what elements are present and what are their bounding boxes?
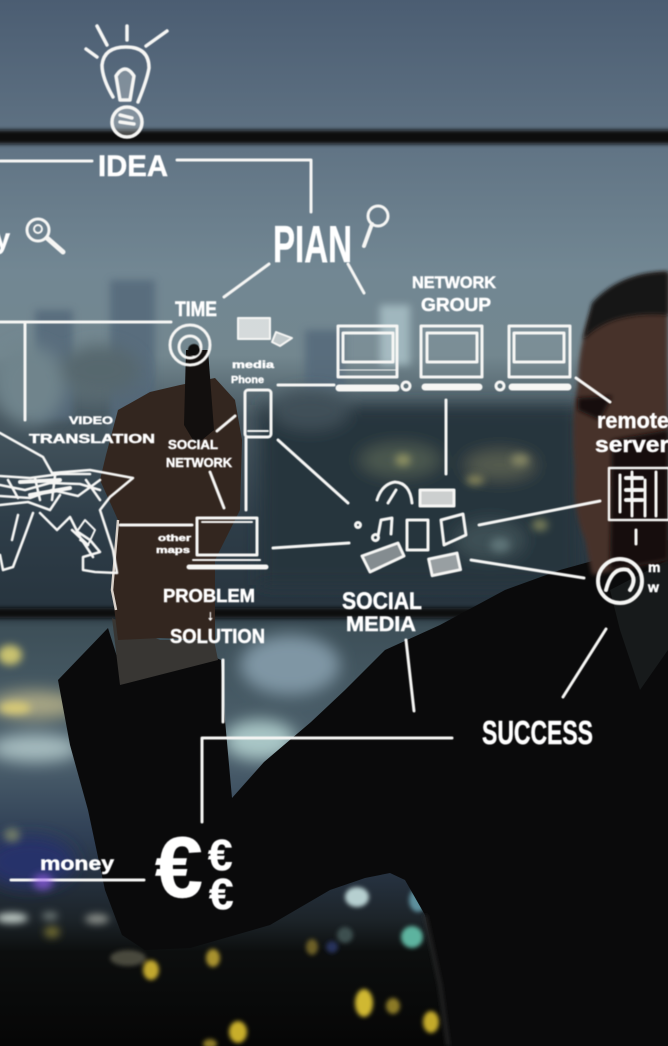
connector lines: network [278,378,610,474]
label: phone: Phone [231,375,264,386]
man: cuff [112,618,218,685]
label: network group: NETWORK [412,273,497,292]
man: suit body and sleeve [58,540,668,1046]
connector: time to left [0,322,171,420]
label: time: TIME [175,298,217,321]
label: cloud text: m [648,559,660,575]
connector: money [11,878,144,882]
icon: large euro: € [155,820,203,916]
icon: monitors [338,326,570,390]
violet glow on money line [33,874,53,890]
man: hand holding marker [100,350,242,640]
icon: magnifier left [27,219,63,252]
window frame bars [0,130,668,618]
icon: small euro top: € [208,831,232,880]
icon: mail [238,318,292,346]
icon: cloud circle [598,559,642,603]
label: cloud text second line: w [647,579,659,595]
connector: euro up [202,629,606,822]
label: idea: IDEA [98,150,168,183]
label: social: SOCIAL [342,588,422,615]
label: server: server [595,432,668,457]
icon: server rack [609,468,668,520]
label: problem: PROBLEM [163,586,255,606]
man: head and hair [573,272,668,575]
label: maps: maps [156,545,190,555]
icon: magnifier plan [364,206,388,246]
icon: laptop [189,518,266,567]
label: arrow: ↓ [207,607,214,623]
world map sketch [0,433,133,573]
sketch labels [0,150,668,919]
icon: time dial [170,325,210,365]
icon: social media cluster [356,482,466,576]
city skyline and lights [0,280,580,938]
connectors: phone and laptop [120,416,349,548]
connector: idea to plan [0,160,311,212]
label: solution: SOLUTION [170,626,265,648]
shirt collar and tie [610,560,668,690]
label: social network: SOCIAL [168,437,218,452]
bottom city lights [110,887,439,1046]
label: other: other [158,533,192,543]
icon: small euro bottom: € [209,870,233,919]
label: video: VIDEO [69,415,114,427]
label: success: SUCCESS [482,714,593,751]
icon: light bulb [86,26,167,137]
connectors: social media to server and cloud [471,501,636,578]
label: media player: media [232,360,275,371]
label: translation: TRANSLATION [29,431,155,446]
label: plan: PIAN [273,216,352,274]
label: media: MEDIA [346,613,416,636]
label: network: NETWORK [166,455,233,470]
icon: smartphone [245,390,271,437]
label: money: money [40,854,115,875]
label: group: GROUP [421,295,491,315]
connectors: plan branches [224,264,364,297]
